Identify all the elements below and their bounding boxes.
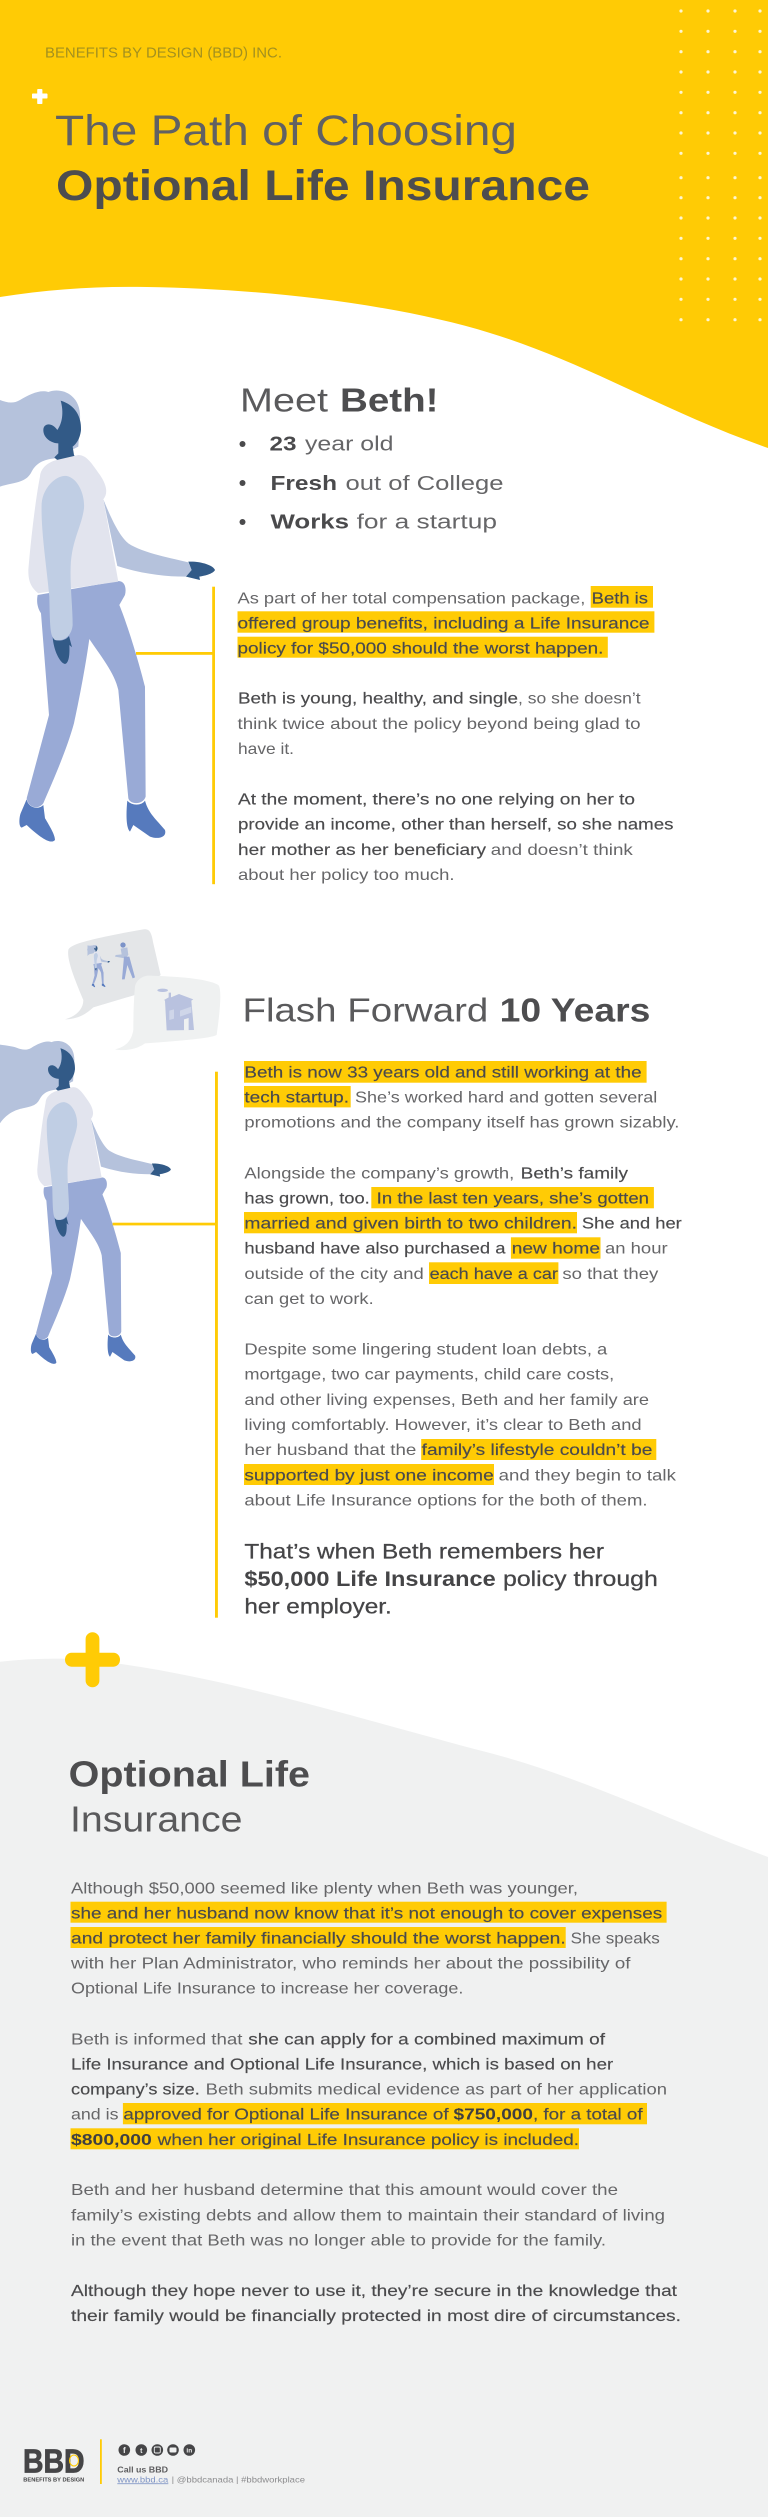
text block: family has grown: an hour [605,1241,668,1258]
text block: young and healthy: Beth is young, healthy, and single [238,690,518,707]
social icons: t [140,2448,143,2455]
text block: amount would cover [71,2182,665,2250]
text block: not enough: Optional Life Insurance to increase her coverage. [71,1981,463,1998]
text block: combined maximum: $800,000 [71,2132,152,2149]
text block: combined maximum: Life Insurance and Optional Life Insurance, which is based on her [71,2057,614,2074]
text block: lingering debts: family’s lifestyle couldn’t be [422,1442,653,1459]
callout: remembers policy: her employer. [244,1595,392,1618]
text block: lingering debts: living comfortably. However, it’s clear to Beth and [244,1417,642,1434]
social icons: f [123,2446,126,2455]
text block: lingering debts: mortgage, two car payments, child care costs, [244,1366,614,1384]
text block: family has grown: new home [512,1241,600,1258]
text block: compensation package: Beth is [592,590,648,607]
text block: not enough: She speaks [571,1930,660,1947]
text block: family has grown: outside of the city and [244,1266,424,1283]
text block: now 33 [244,1061,679,1132]
icon: white plus [32,89,47,104]
heading: Optional Life Insurance [69,1754,310,1840]
text block: not enough: with her Plan Administrator, who reminds her about the possibility of [70,1956,631,1973]
text block: combined maximum: and is [71,2107,118,2124]
text block: family has grown: so that they [562,1266,658,1283]
header background wave [0,0,768,448]
heading: Meet Beth: Meet [240,382,328,419]
text block: not enough [70,1880,667,1998]
callout: remembers policy: $50,000 Life Insurance [244,1568,496,1591]
text block: young and healthy: , so she doesn’t [518,690,641,707]
list: Beth's facts: year old [305,434,394,456]
text block: combined maximum: approved for Optional Life Insurance of [123,2107,449,2124]
text block: compensation package: offered group benefits, including a Life Insurance [238,615,650,632]
contact details: www.bbd.ca [116,2474,169,2484]
text block: family has grown: married and given birth to two children. [244,1215,577,1232]
text block: beneficiary: and doesn’t think [491,842,634,859]
figure: Beth ten years later [0,1041,171,1364]
dot pattern [679,9,762,321]
contact details [116,2464,305,2484]
connector: second timeline bar [113,1072,218,1618]
text block: young and healthy: think twice about the policy beyond being glad to [238,716,641,733]
text block: not enough: and protect her family financially should the worst happen. [71,1930,566,1947]
text block: beneficiary: provide an income, other than herself, so she names [238,816,674,834]
heading: Flash Forward: Flash Forward [242,992,488,1029]
icon: speech bubble with house [115,976,220,1050]
text block: combined maximum: $750,000 [454,2107,533,2124]
text block: lingering debts: and other living expenses, Beth and her family are [244,1392,649,1409]
social icons: in [186,2448,192,2454]
callout: remembers policy: That’s when Beth remembers her [244,1540,604,1563]
text block: compensation package [238,586,654,658]
contact details: | @bbdcanada | #bbdworkplace [172,2474,305,2484]
heading: Meet Beth: Beth! [340,382,438,419]
text block: now 33: She’s worked hard and gotten several [355,1090,657,1107]
text block: lingering debts: her husband that the [244,1442,416,1459]
logo: BBD: BBD [23,2443,84,2480]
callout: remembers policy [244,1540,658,1618]
list: Beth's facts: out of College [346,473,504,495]
heading: Optional Life Insurance: Optional Life [69,1754,310,1795]
title: The Path of Choosing [55,107,517,155]
text block: family has grown [244,1165,683,1308]
text block: young and healthy [238,690,641,758]
connector: first timeline bar [136,587,215,884]
text block: combined maximum: she can apply for a combined maximum of [248,2031,606,2048]
text block: combined maximum: , for a total of [533,2107,643,2124]
icon: speech bubble with couple [65,929,161,1019]
text block: lingering debts [244,1341,677,1509]
text block: lingering debts: Despite some lingering student loan debts, a [244,1341,607,1358]
text block: combined maximum: Beth submits medical evidence as part of her application [206,2082,667,2099]
text block: combined maximum: company’s size. [71,2082,200,2099]
title: Optional Life Insurance [56,162,590,210]
heading: Meet Beth [240,382,438,419]
text block: family has grown: can get to work. [244,1291,374,1308]
contact details: Call us BBD [117,2464,168,2474]
list: Beth's facts: 23 [270,434,296,456]
text block: compensation package: policy for $50,000 should the worst happen. [238,640,603,657]
text block: lingering debts: and they begin to talk [499,1467,677,1484]
text block: young and healthy: have it. [238,741,294,758]
figure: young Beth [0,391,215,842]
heading: Flash Forward: 10 Years [500,992,650,1029]
panel background: grey wave [0,1659,768,2517]
text block: family has grown: Beth’s family [521,1165,628,1182]
text block: compensation package: As part of her total compensation package, [238,590,585,607]
text block: now 33: promotions and the company itself has grown sizably. [244,1115,679,1132]
text block: combined maximum [70,2031,667,2149]
text block: lingering debts: supported by just one income [244,1467,494,1484]
text block: beneficiary: about her policy too much. [238,867,454,884]
list: Beth's facts: Works [270,512,349,534]
text block: not enough: Although $50,000 seemed like plenty when Beth was younger, [71,1880,578,1897]
text block: closing statement [71,2283,681,2325]
text block: family has grown: has grown, too. [244,1190,370,1207]
list: Beth's facts: for a startup [357,512,497,534]
text block: family has grown: husband have also purchased a [244,1241,506,1258]
text block: combined maximum: when her original Life Insurance policy is included. [157,2132,579,2149]
text block: family has grown: Alongside the company’s growth, [244,1165,514,1182]
text block: lingering debts: about Life Insurance options for the both of them. [244,1492,648,1509]
logo: BBD: BENEFITS BY DESIGN [23,2477,84,2483]
text block: closing statement: Although they hope never to use it, they’re secure in the knowledge that [71,2283,678,2300]
text block: family has grown: In the last ten years, she’s gotten [377,1190,649,1207]
text block: beneficiary [238,791,674,884]
text block: beneficiary: At the moment, there’s no one relying on her to [238,791,635,808]
list: Beth's facts [240,434,504,534]
text block: now 33: tech startup. [244,1090,349,1107]
text block: beneficiary: her mother as her beneficiary [238,842,486,859]
text block: family has grown: each have a car [430,1266,559,1283]
text block: not enough: she and her husband now know that it’s not enough to cover expenses [71,1905,662,1922]
footer divider [100,2439,102,2484]
text block: closing statement: their family would be financially protected in most dire of circumstances. [71,2308,681,2325]
heading: Optional Life Insurance: Insurance [70,1799,242,1840]
icon: yellow plus [65,1632,120,1687]
text block: now 33: Beth is now 33 years old and still working at the [244,1064,642,1081]
text block: family has grown: She and her [582,1215,683,1232]
text block: amount would cover: in the event that Beth was no longer able to provide for the family. [71,2232,606,2250]
social icons [118,2444,195,2456]
list: Beth's facts: Fresh [270,473,337,495]
callout: remembers policy: policy through [503,1568,658,1591]
text block: amount would cover: family’s existing debts and allow them to maintain their standard of living [71,2207,665,2224]
heading: Flash Forward [242,992,650,1029]
title [55,107,590,210]
company name: BENEFITS BY DESIGN (BBD) INC. [45,44,282,62]
text block: combined maximum: Beth is informed that [71,2031,243,2048]
text block: amount would cover: Beth and her husband determine that this amount would cover the [71,2182,618,2199]
